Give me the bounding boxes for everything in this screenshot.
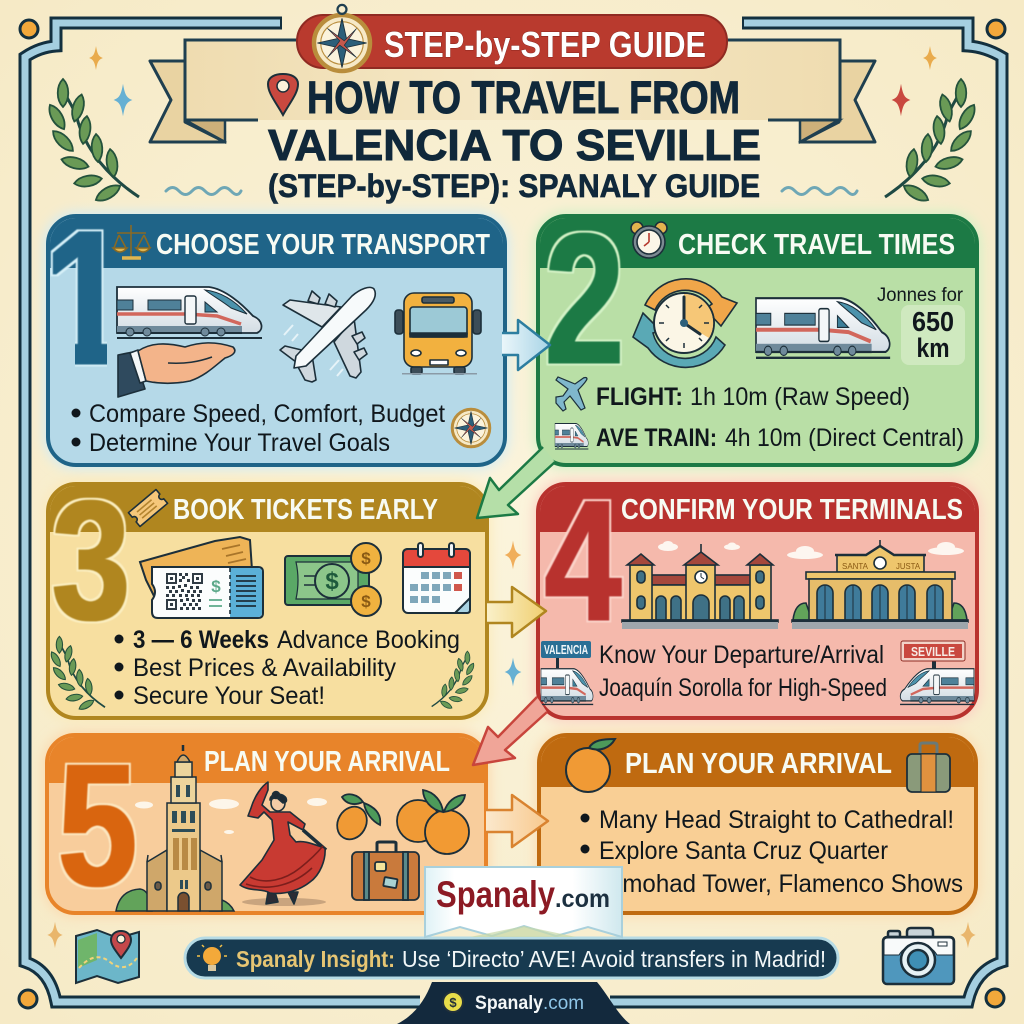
icon: small train bbox=[555, 424, 588, 449]
heading: CONFIRM YOUR TERMINALS bbox=[621, 494, 963, 526]
icon: location pin bbox=[268, 74, 298, 115]
icon: oranges small bbox=[331, 794, 380, 845]
bullet list: 3 — 6 Weeks bbox=[133, 626, 269, 654]
title bbox=[268, 72, 761, 204]
mid stars bbox=[47, 541, 976, 948]
icon: scales bbox=[113, 225, 150, 258]
laurel small right bbox=[432, 651, 476, 710]
train time: AVE TRAIN: bbox=[596, 424, 717, 452]
icon: money and coins: $ bbox=[361, 592, 371, 611]
panel 4: confirm your terminals bbox=[534, 465, 981, 722]
bullet list: Compare Speed, Comfort, Budget bbox=[89, 400, 445, 428]
distance callout: Jonnes for bbox=[877, 285, 964, 306]
sign: valencia: VALENCIA bbox=[544, 642, 588, 657]
bullet list bbox=[580, 806, 963, 898]
distance callout: 650 bbox=[912, 306, 954, 337]
sign: seville: SEVILLE bbox=[911, 644, 955, 659]
footer badge bbox=[397, 982, 630, 1024]
insight bar bbox=[185, 938, 838, 978]
icon: bus bbox=[395, 293, 481, 374]
panel 5: plan your arrival bbox=[43, 727, 490, 922]
bullet list: Determine Your Travel Goals bbox=[89, 429, 390, 457]
icon: suitcase bbox=[352, 842, 419, 900]
icon: ticket bbox=[128, 490, 168, 526]
bullet list: Secure Your Seat! bbox=[133, 682, 325, 710]
icon: clouds bbox=[658, 541, 964, 559]
title: VALENCIA TO SEVILLE bbox=[268, 121, 761, 170]
description text: Joaquín Sorolla for High-Speed bbox=[599, 674, 887, 702]
bullet list: Explore Santa Cruz Quarter bbox=[599, 837, 888, 865]
panel 2: check travel times bbox=[534, 196, 981, 469]
arrow 4 to 5 bbox=[473, 697, 547, 765]
icon: money and coins bbox=[285, 543, 381, 616]
badge: step-by-step guide: STEP-by-STEP GUIDE bbox=[384, 24, 706, 65]
icon: oranges large bbox=[397, 790, 469, 854]
arrow 2 to 3 bbox=[477, 447, 555, 518]
laurel left bbox=[45, 79, 139, 205]
distance callout: km bbox=[916, 333, 950, 363]
sign: valencia bbox=[541, 641, 591, 668]
icon: calendar bbox=[403, 543, 470, 613]
panel 1: choose your transport bbox=[44, 190, 509, 469]
number 2: 2 bbox=[545, 196, 624, 403]
icon: map bbox=[76, 930, 139, 983]
icon: clock with arrows bbox=[633, 279, 737, 367]
icon: coin: $ bbox=[449, 995, 457, 1010]
icon: compass bbox=[452, 409, 490, 447]
number 4: 4 bbox=[545, 465, 621, 657]
distance callout bbox=[877, 285, 965, 365]
title: (STEP-by-STEP): SPANALY GUIDE bbox=[268, 168, 760, 204]
icon: tickets with qr bbox=[140, 537, 263, 618]
icon: flamenco dancer bbox=[240, 782, 326, 906]
icon: hand bbox=[118, 343, 235, 397]
logo tag bbox=[425, 867, 622, 937]
description text: Know Your Departure/Arrival bbox=[599, 641, 884, 669]
flight time: FLIGHT: bbox=[596, 383, 683, 411]
heading: PLAN YOUR ARRIVAL bbox=[204, 746, 450, 778]
description text bbox=[599, 641, 887, 702]
icon: money and coins: $ bbox=[325, 568, 339, 595]
icon: coin bbox=[443, 992, 463, 1012]
title: HOW TO TRAVEL FROM bbox=[307, 72, 740, 123]
heading: BOOK TICKETS EARLY bbox=[173, 494, 438, 526]
arrow 5 to 6 bbox=[486, 795, 548, 847]
footer badge: .com bbox=[543, 993, 584, 1014]
number 5: 5 bbox=[58, 727, 137, 922]
badge: step-by-step guide bbox=[297, 5, 727, 71]
train time: 4h 10m (Direct Central) bbox=[725, 424, 964, 452]
icon: valencia station bbox=[622, 544, 778, 629]
bullet list: Best Prices & Availability bbox=[133, 654, 396, 682]
panel 6: plan your arrival details bbox=[535, 731, 980, 917]
panel 3: book tickets early bbox=[44, 466, 491, 722]
icon: train bbox=[756, 298, 890, 358]
number 1: 1 bbox=[44, 190, 128, 405]
icon: santa justa station bbox=[792, 540, 968, 629]
bullet list: Many Head Straight to Cathedral! bbox=[599, 806, 954, 834]
sign text: JUSTA bbox=[896, 562, 921, 571]
sign: seville bbox=[901, 641, 965, 670]
icon: small plane bbox=[556, 377, 587, 411]
bullet list: Almohad Tower, Flamenco Shows bbox=[601, 870, 963, 898]
heading: CHECK TRAVEL TIMES bbox=[678, 229, 955, 261]
arrow 3 to 4 bbox=[487, 587, 546, 637]
icon: alarm clock bbox=[631, 222, 667, 258]
icon: giralda cathedral bbox=[116, 745, 234, 911]
icon: light bulb bbox=[197, 945, 227, 971]
heading: CHOOSE YOUR TRANSPORT bbox=[156, 229, 490, 261]
icon: train right bbox=[900, 669, 974, 704]
laurel small left bbox=[49, 636, 105, 712]
icon: train left bbox=[541, 669, 593, 704]
icon: orange bbox=[566, 739, 615, 792]
bullet list: Advance Booking bbox=[277, 626, 460, 654]
header ribbon bbox=[150, 40, 875, 142]
icon: train bbox=[117, 287, 262, 338]
insight bar: Spanaly Insight: bbox=[236, 946, 395, 972]
flight time: 1h 10m (Raw Speed) bbox=[690, 383, 910, 411]
logo tag: .com bbox=[555, 885, 610, 913]
bullet list bbox=[114, 626, 460, 710]
bullet list bbox=[72, 400, 445, 457]
arrow 1 to 2 bbox=[502, 320, 550, 370]
icon: clouds bbox=[135, 798, 327, 834]
footer badge: Spanaly bbox=[475, 993, 543, 1014]
icon: compass bbox=[314, 5, 370, 71]
laurel right bbox=[885, 79, 979, 205]
icon: plane bbox=[280, 287, 375, 382]
dollar label: $ bbox=[211, 577, 221, 596]
logo tag: Spanaly bbox=[436, 874, 555, 915]
icon: camera bbox=[883, 928, 954, 984]
icon: money and coins: $ bbox=[361, 549, 371, 568]
stars bbox=[89, 46, 937, 116]
icon: suitcase bbox=[907, 743, 950, 792]
waves bbox=[166, 188, 857, 194]
qr code bbox=[166, 573, 203, 610]
heading: PLAN YOUR ARRIVAL bbox=[625, 748, 892, 780]
sign text: SANTA bbox=[842, 562, 869, 571]
number 3: 3 bbox=[52, 466, 130, 656]
insight bar: Use ‘Directo’ AVE! Avoid transfers in Madrid! bbox=[402, 946, 826, 972]
